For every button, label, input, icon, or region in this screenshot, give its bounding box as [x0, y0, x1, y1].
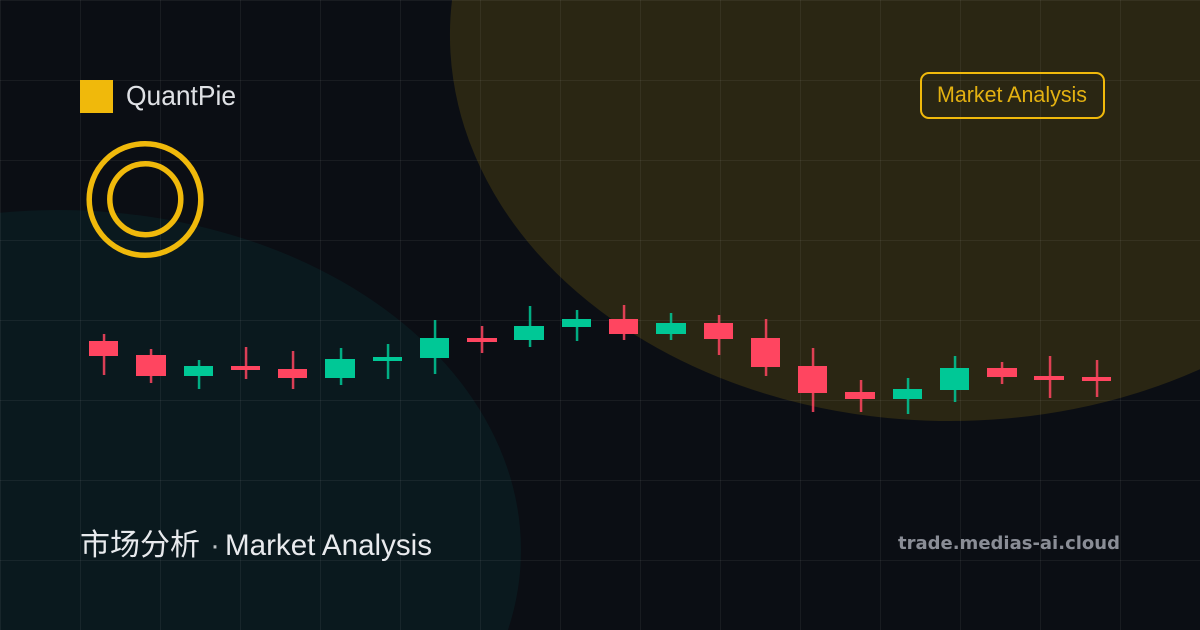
icon: concentric rings	[89, 144, 201, 255]
teal background ellipse	[0, 210, 521, 630]
badge: Market Analysis	[921, 73, 1104, 118]
title: 市场分析	[80, 529, 200, 562]
domain: trade.medias-ai.cloud	[898, 533, 1120, 554]
candlestick chart	[89, 305, 1111, 414]
logo square	[80, 80, 113, 113]
title: ·	[210, 529, 220, 562]
title	[80, 529, 432, 562]
brand name: QuantPie	[126, 80, 236, 111]
title: Market Analysis	[225, 529, 432, 562]
gold background ellipse	[450, 0, 1200, 421]
badge: Market Analysis: Market Analysis	[937, 82, 1087, 107]
